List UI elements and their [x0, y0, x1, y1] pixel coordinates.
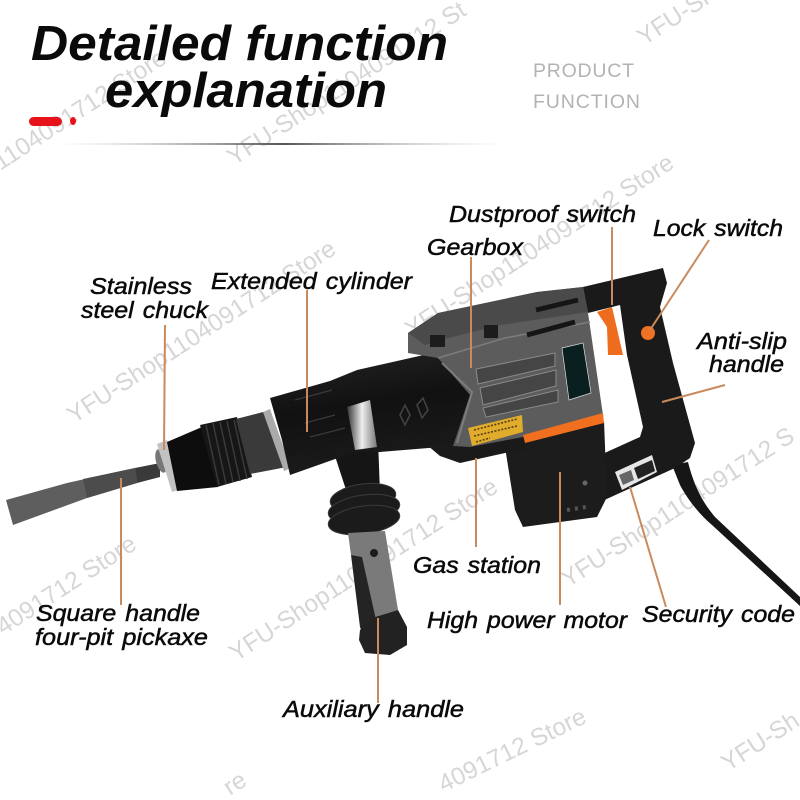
- label: security code: Security code: [642, 601, 795, 627]
- label: gearbox: Gearbox: [427, 234, 524, 260]
- label: square handle four-pit pickaxe: [35, 600, 208, 650]
- chuck: [153, 409, 291, 492]
- auxiliary handle: [326, 480, 407, 655]
- label: square handle four-pit pickaxe: four-pit pickaxe: [35, 624, 208, 650]
- header rule: [58, 143, 509, 145]
- handle tip: [359, 610, 407, 655]
- watermarks: YFU-Shop1104091712 Store: [401, 149, 679, 343]
- watermarks: 4091712 Store: [434, 703, 591, 798]
- security QR labels: [615, 455, 657, 490]
- label: stainless steel chuck: steel chuck: [81, 297, 209, 323]
- lock switch button: [641, 326, 655, 340]
- chisel bit: [6, 463, 160, 525]
- subtitle: product function: [533, 60, 640, 113]
- dark window: [562, 343, 591, 400]
- extended cylinder: [270, 352, 472, 502]
- watermarks: YFU-Shop1104091712 Store: [225, 473, 503, 667]
- red accent dash: [29, 117, 76, 126]
- main housing: [408, 268, 695, 527]
- label: stainless steel chuck: Stainless: [90, 273, 192, 299]
- callout lines: [121, 227, 725, 703]
- lower ledge: [427, 435, 525, 463]
- label: high power motor: High power motor: [427, 607, 628, 633]
- subtitle: product function: PRODUCT: [533, 60, 634, 82]
- watermarks: YFU-Shop1104091712 St: [223, 0, 471, 171]
- motor housing: [505, 421, 607, 527]
- gearbox housing: [408, 287, 603, 447]
- rotary hammer drill: [6, 268, 800, 655]
- auxiliary neck joint: [333, 440, 380, 502]
- title: Detailed function: [31, 17, 448, 71]
- orange band: [523, 413, 604, 443]
- rubber bellows: [326, 480, 402, 539]
- label: square handle four-pit pickaxe: Square handle: [36, 600, 200, 626]
- rear handle: [583, 268, 695, 502]
- label: anti-slip handle: Anti-slip: [695, 328, 787, 354]
- subtitle: product function: FUNCTION: [533, 91, 640, 113]
- watermarks: re: [219, 767, 252, 800]
- label: lock switch: Lock switch: [653, 215, 783, 241]
- side chevron: [442, 363, 472, 443]
- orange trigger: [597, 307, 623, 355]
- label: gas station: Gas station: [413, 552, 541, 578]
- title: explanation: [105, 64, 387, 118]
- vents: [476, 353, 558, 417]
- label: anti-slip handle: handle: [709, 351, 784, 377]
- watermarks: YFU-Shop1104091712 S: [557, 422, 799, 593]
- label: stainless steel chuck: [81, 273, 209, 323]
- grey grip: [348, 531, 398, 617]
- power cable: [672, 462, 800, 606]
- title: [31, 17, 448, 118]
- label: anti-slip handle: [695, 328, 787, 377]
- yellow warning label: [468, 415, 523, 446]
- label: extended cylinder: Extended cylinder: [211, 268, 413, 294]
- label: auxiliary handle: Auxiliary handle: [281, 696, 464, 722]
- watermarks: YFU-Shop1104091712 Store: [63, 235, 341, 429]
- label: dustproof switch: Dustproof switch: [449, 201, 636, 227]
